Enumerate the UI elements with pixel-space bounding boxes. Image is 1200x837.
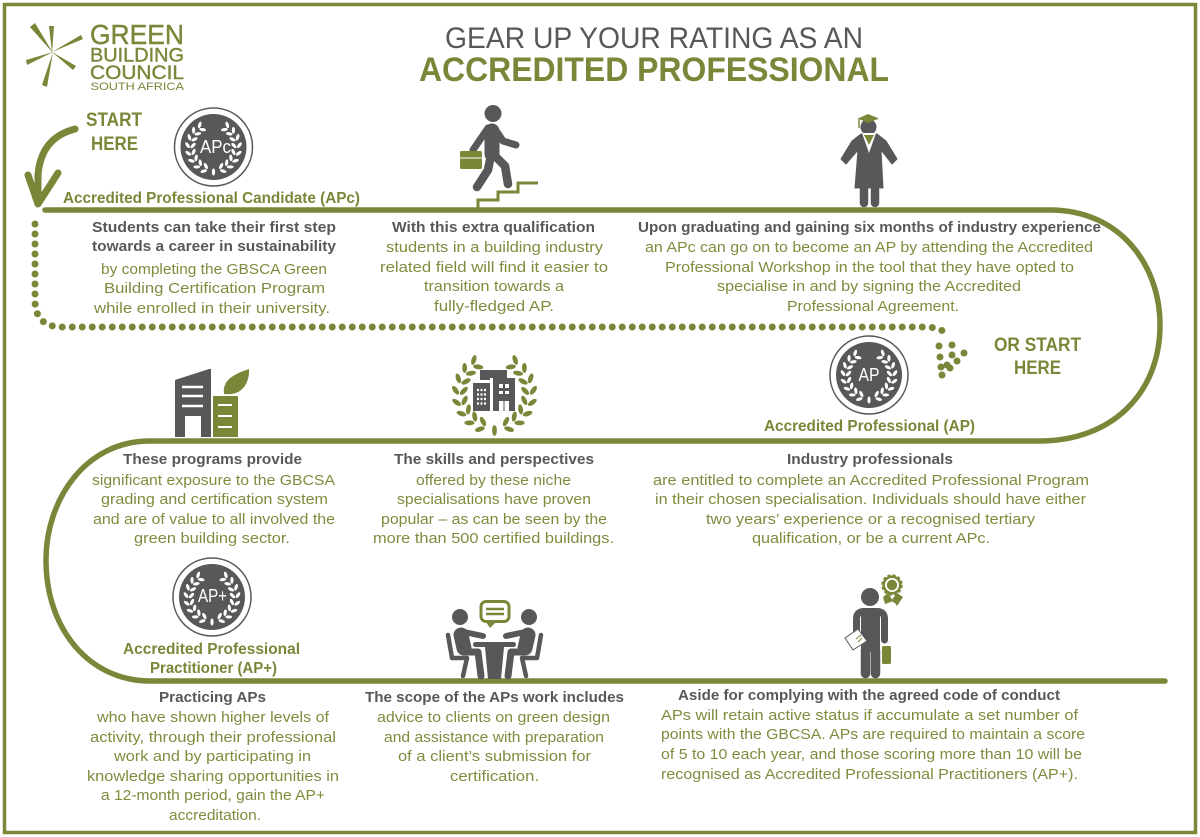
text block: these programs [92, 451, 335, 547]
icon: person climbing stairs [460, 105, 538, 208]
text block: upon graduating: Upon graduating and gaining six months of industry experience [638, 219, 1101, 236]
logo: Green Building Council South Africa [26, 19, 185, 93]
icon: meeting at table [448, 602, 541, 679]
text block: practicing APs: who have shown higher levels of [96, 709, 330, 726]
badge: AP [830, 336, 908, 414]
label: Accredited Professional Candidate: Accredited Professional Candidate (APc) [63, 190, 360, 207]
text block: these programs: and are of value to all involved the [93, 511, 335, 528]
badge: AP: AP [858, 365, 880, 385]
text block: practicing APs: Practicing APs [159, 689, 266, 706]
text block: industry professionals: in their chosen specialisation. Individuals should have either [655, 491, 1086, 508]
or start here label [994, 335, 1081, 379]
text block: extra qualification: fully-fledged AP. [434, 298, 554, 315]
text block: students first step: while enrolled in their university. [93, 300, 330, 317]
badge: AP+: AP+ [198, 586, 227, 606]
text block: industry professionals [653, 451, 1089, 547]
text block: upon graduating: Professional Workshop in the tool that they have opted to [665, 259, 1074, 276]
badge: APc: APc [200, 137, 231, 157]
start here label: START [86, 110, 142, 131]
text block: students first step: by completing the GBSCA Green [101, 261, 327, 278]
text block: practicing APs: activity, through their professional [90, 729, 336, 746]
text block: industry professionals: are entitled to complete an Accredited Professional Program [653, 472, 1089, 489]
text block: students first step [92, 219, 337, 317]
label: Accredited Professional Practitioner: Accredited Professional [123, 641, 300, 658]
text block: industry professionals: Industry professionals [787, 451, 953, 468]
journey path line [45, 210, 1165, 681]
text block: practicing APs: accreditation. [169, 807, 261, 824]
title [419, 22, 889, 89]
icon: green building and leaf [175, 369, 249, 437]
logo wordmark [90, 19, 185, 93]
text block: extra qualification: transition towards a [424, 278, 565, 295]
icon: logo star [26, 23, 83, 87]
logo wordmark: BUILDING [90, 46, 184, 66]
text block: these programs: significant exposure to the GBCSA [92, 472, 335, 489]
text block: upon graduating: Professional Agreement. [787, 298, 959, 315]
text block: scope of work [365, 689, 624, 785]
dotted arrow head [936, 342, 968, 378]
text block: extra qualification [380, 219, 608, 315]
text block: code of conduct: APs will retain active status if accumulate a set number of [661, 707, 1079, 724]
title: GEAR UP YOUR RATING AS AN [445, 22, 863, 55]
text block: students first step: towards a career in sustainability [92, 238, 337, 255]
text block: extra qualification: With this extra qualification [392, 219, 595, 236]
icon: laurel wreath with buildings [451, 354, 538, 436]
dotted alternative path [35, 224, 948, 336]
label: Accredited Professional Practitioner [123, 641, 300, 677]
arrow: start here [28, 129, 75, 204]
logo wordmark: COUNCIL [90, 62, 184, 84]
badge: AP+ [173, 558, 251, 636]
text block: scope of work: advice to clients on green design [377, 709, 610, 726]
text block: upon graduating: an APc can go on to become an AP by attending the Accredited [645, 239, 1093, 256]
text block: code of conduct: recognised as Accredited Professional Practitioners (AP+). [661, 766, 1078, 783]
text block: upon graduating [638, 219, 1101, 315]
logo wordmark: GREEN [90, 19, 184, 50]
text block: skills and perspectives: popular – as can be seen by the [381, 511, 607, 528]
or start here label: HERE [1014, 358, 1061, 379]
text block: upon graduating: specialise in and by signing the Accredited [717, 278, 1021, 295]
or start here label: OR START [994, 335, 1081, 356]
text block: practicing APs: work and by participating in [113, 748, 311, 765]
text block: these programs: These programs provide [123, 451, 302, 468]
text block: these programs: green building sector. [134, 530, 290, 547]
icon: graduate [841, 114, 897, 203]
label: Accredited Professional Practitioner: Practitioner (AP+) [150, 660, 277, 677]
text block: skills and perspectives: offered by these niche [416, 472, 571, 489]
icon: professional with award rosette [845, 576, 903, 674]
text block: extra qualification: related field will find it easier to [380, 259, 608, 276]
text block: skills and perspectives: The skills and perspectives [394, 451, 594, 468]
text block: practicing APs [87, 689, 339, 824]
text block: students first step: Students can take their first step [92, 219, 336, 236]
text block: skills and perspectives: specialisations have proven [397, 491, 591, 508]
text block: industry professionals: qualification, or be a current APc. [752, 530, 990, 547]
text block: extra qualification: students in a building industry [386, 239, 604, 256]
text block: practicing APs: knowledge sharing opportunities in [87, 768, 339, 785]
logo wordmark: SOUTH AFRICA [90, 81, 185, 93]
start here label: HERE [91, 134, 138, 155]
text block: scope of work: of a client’s submission for [398, 748, 591, 765]
text block: code of conduct: points with the GBCSA. APs are required to maintain a score [661, 726, 1085, 743]
text block: these programs: grading and certification system [101, 491, 328, 508]
text block: scope of work: The scope of the APs work includes [365, 689, 624, 706]
label: Accredited Professional: Accredited Professional (AP) [764, 418, 975, 435]
text block: code of conduct [661, 687, 1085, 783]
text block: industry professionals: two years’ experience or a recognised tertiary [706, 511, 1036, 528]
title: ACCREDITED PROFESSIONAL [419, 51, 889, 89]
text block: code of conduct: Aside for complying with the agreed code of conduct [678, 687, 1060, 704]
start here label [86, 110, 142, 155]
text block: students first step: Building Certification Program [104, 280, 325, 297]
text block: scope of work: and assistance with preparation [384, 729, 604, 746]
text block: skills and perspectives [373, 451, 614, 547]
text block: scope of work: certification. [450, 768, 539, 785]
badge: APc [174, 108, 252, 186]
text block: code of conduct: of 5 to 10 each year, and those scoring more than 10 will be [661, 746, 1082, 763]
text block: practicing APs: a 12-month period, gain the AP+ [101, 787, 325, 804]
text block: skills and perspectives: more than 500 certified buildings. [373, 530, 614, 547]
